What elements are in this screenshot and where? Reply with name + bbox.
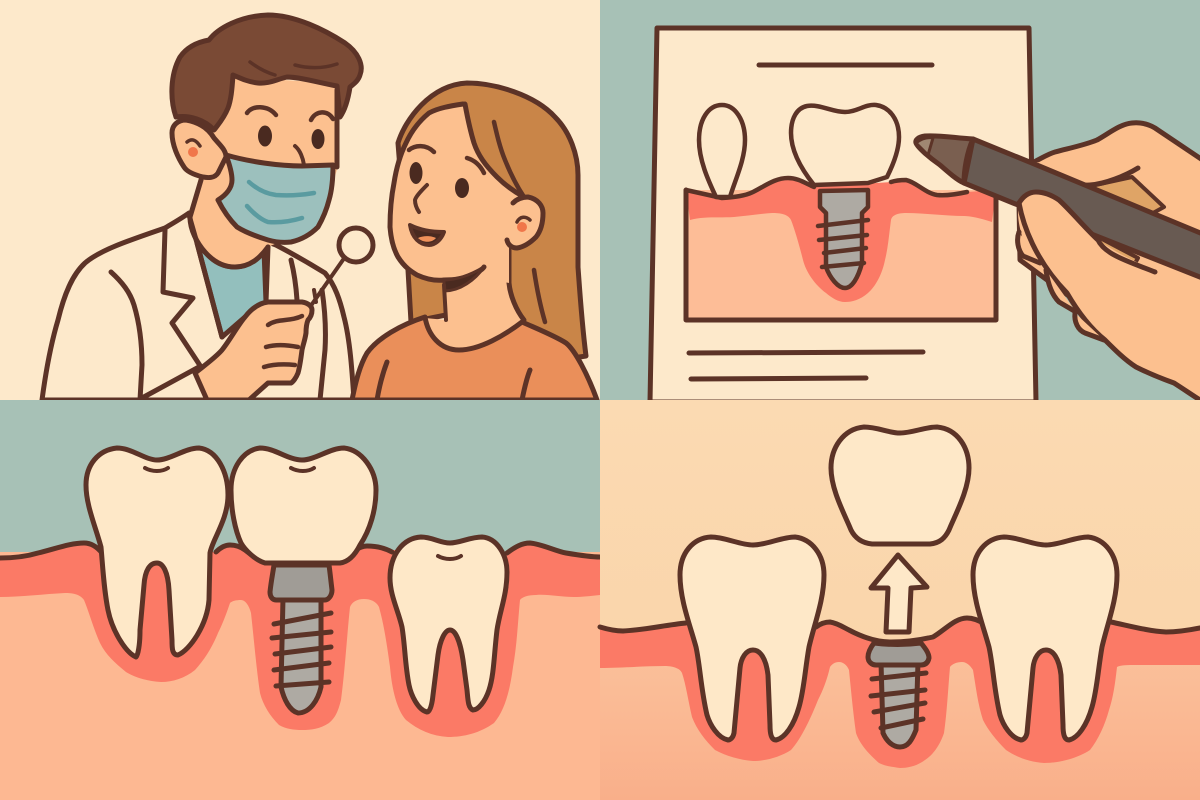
implant screw <box>270 565 332 713</box>
patient face <box>390 104 524 283</box>
patient mouth <box>410 225 444 245</box>
arrow up <box>871 555 927 632</box>
dentist face <box>210 76 340 240</box>
dentist ear <box>172 120 226 178</box>
dentist brows and eyes <box>247 107 333 120</box>
panel: implant plan <box>600 0 1200 405</box>
diagram crown <box>791 105 899 185</box>
diagram implant screw <box>818 190 868 288</box>
document <box>650 28 1036 402</box>
implant screw <box>868 643 929 747</box>
patient hair <box>398 83 586 360</box>
right tooth <box>973 537 1117 740</box>
hand fingers <box>1018 192 1200 405</box>
dentist hair <box>172 15 361 130</box>
surgical mask <box>218 155 333 242</box>
gum <box>0 543 600 800</box>
left tooth <box>680 537 824 740</box>
diagram tooth root <box>699 105 745 197</box>
panel: implant in gum <box>0 400 600 800</box>
pen <box>964 139 1200 281</box>
left tooth <box>86 448 228 657</box>
floating crown <box>831 427 969 544</box>
panel: consultation <box>0 0 600 400</box>
patient neck <box>425 240 522 350</box>
icon: hand with pen <box>916 123 1200 405</box>
gum <box>600 618 1200 800</box>
patient sweater <box>352 317 597 400</box>
icon: dentist <box>42 15 361 400</box>
gum diagram <box>686 178 996 320</box>
patient brows, eyes, nose <box>409 146 484 173</box>
patient ear <box>507 197 543 248</box>
crown <box>231 448 376 563</box>
document heading line <box>759 62 932 68</box>
chin shadow <box>444 267 484 291</box>
icon: dental mirror <box>310 228 373 307</box>
icon: dentist hand <box>195 302 312 400</box>
right tooth <box>390 537 507 712</box>
document text lines <box>689 352 923 379</box>
panel: crown placement <box>600 400 1200 800</box>
icon: patient <box>352 83 597 400</box>
